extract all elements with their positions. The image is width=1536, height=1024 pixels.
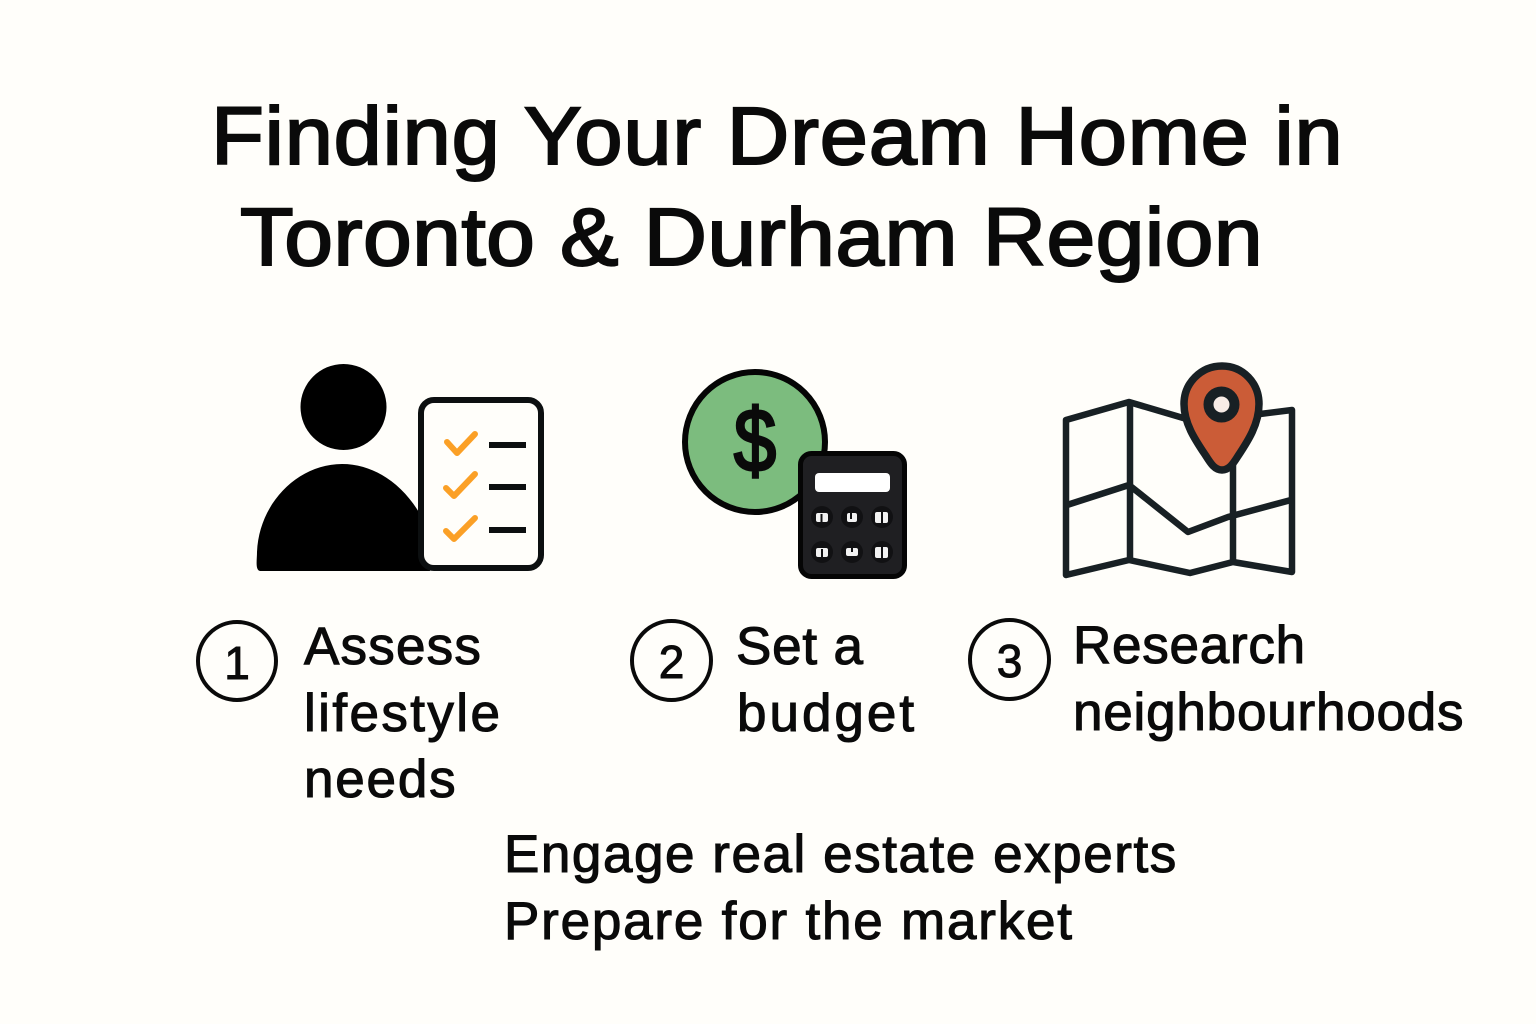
step 3 xyxy=(968,616,1464,742)
step 3 label: neighbourhoods xyxy=(1073,682,1464,742)
step 1 label: Assess xyxy=(304,617,482,676)
number badge 2: 2 xyxy=(659,636,684,688)
closing lines: Prepare for the market xyxy=(504,892,1074,950)
step 1 label: lifestyle xyxy=(304,684,502,742)
icon: person with checklist xyxy=(256,364,544,571)
step 1 xyxy=(196,617,502,809)
icon: map with location pin xyxy=(1062,362,1296,578)
title: Finding Your Dream Home in xyxy=(211,91,1343,182)
number badge 2 xyxy=(630,619,713,702)
step 2 label xyxy=(736,617,917,742)
closing lines xyxy=(504,825,1178,950)
title: Toronto & Durham Region xyxy=(240,192,1263,283)
step 3 label: Research xyxy=(1073,616,1306,675)
step 1 label: needs xyxy=(304,750,457,809)
number badge 1: 1 xyxy=(224,637,250,689)
step 2 xyxy=(630,617,917,742)
closing lines: Engage real estate experts xyxy=(504,825,1178,884)
number badge 3: 3 xyxy=(997,635,1022,687)
step 2 label: Set a xyxy=(736,617,864,676)
step 3 label xyxy=(1073,616,1464,742)
number badge 1 xyxy=(196,620,278,702)
step 1 label xyxy=(303,617,502,809)
number badge 3 xyxy=(968,618,1051,701)
icon: dollar coin and calculator xyxy=(682,369,907,579)
step 2 label: budget xyxy=(737,684,917,742)
icon: dollar coin and calculator: $ xyxy=(734,390,776,490)
title xyxy=(211,91,1343,283)
